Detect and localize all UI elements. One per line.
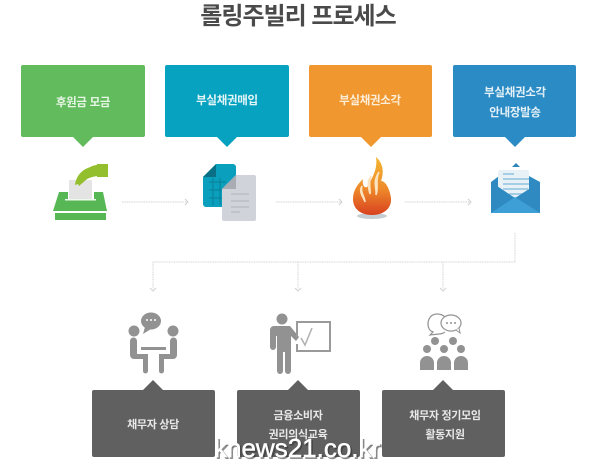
icon: lecturer with board — [270, 314, 330, 374]
panel: step 2 bad debt purchase: 부실채권매입 — [196, 93, 258, 107]
icon: donation box — [53, 164, 108, 220]
icon: consultation — [128, 312, 178, 374]
panel: consumer rights education: 권리의식교육 — [269, 428, 328, 441]
panel: step 2 bad debt purchase — [165, 65, 289, 147]
icon: documents — [203, 164, 256, 221]
panel: step 1 fundraising — [21, 65, 145, 147]
panel: consumer rights education — [237, 380, 360, 457]
panel: debtor regular meetings — [382, 380, 505, 457]
panel: step 4 notice sending: 안내장발송 — [489, 105, 541, 119]
icon: open envelope — [491, 163, 540, 213]
panel: debtor regular meetings: 채무자 정기모임 — [409, 408, 481, 422]
title: 롤링주빌리 프로세스 — [200, 3, 397, 30]
panel: consumer rights education: 금융소비자 — [273, 409, 323, 422]
panel: debtor regular meetings: 활동지원 — [425, 427, 465, 441]
panel: step 3 bad debt burning — [309, 65, 432, 147]
icon: flame — [353, 157, 391, 219]
panel: step 4 notice sending: 부실채권소각 — [484, 86, 547, 99]
panel: step 4 notice sending — [453, 65, 576, 147]
connector: dotted lines to lower row — [150, 233, 515, 291]
panel: step 1 fundraising: 후원금 모금 — [56, 95, 111, 109]
watermark: knews21.co.kr — [216, 434, 382, 464]
watermark: knews21.co.kr — [214, 433, 381, 463]
arrow: step 3 to 4 — [405, 199, 471, 205]
arrow: step 1 to 2 — [122, 199, 188, 205]
panel: debtor consultation: 채무자 상담 — [127, 418, 179, 431]
icon: group meeting — [420, 314, 468, 370]
panel: debtor consultation — [92, 380, 215, 457]
panel: step 3 bad debt burning: 부실채권소각 — [339, 94, 402, 107]
arrow: step 2 to 3 — [276, 199, 342, 205]
